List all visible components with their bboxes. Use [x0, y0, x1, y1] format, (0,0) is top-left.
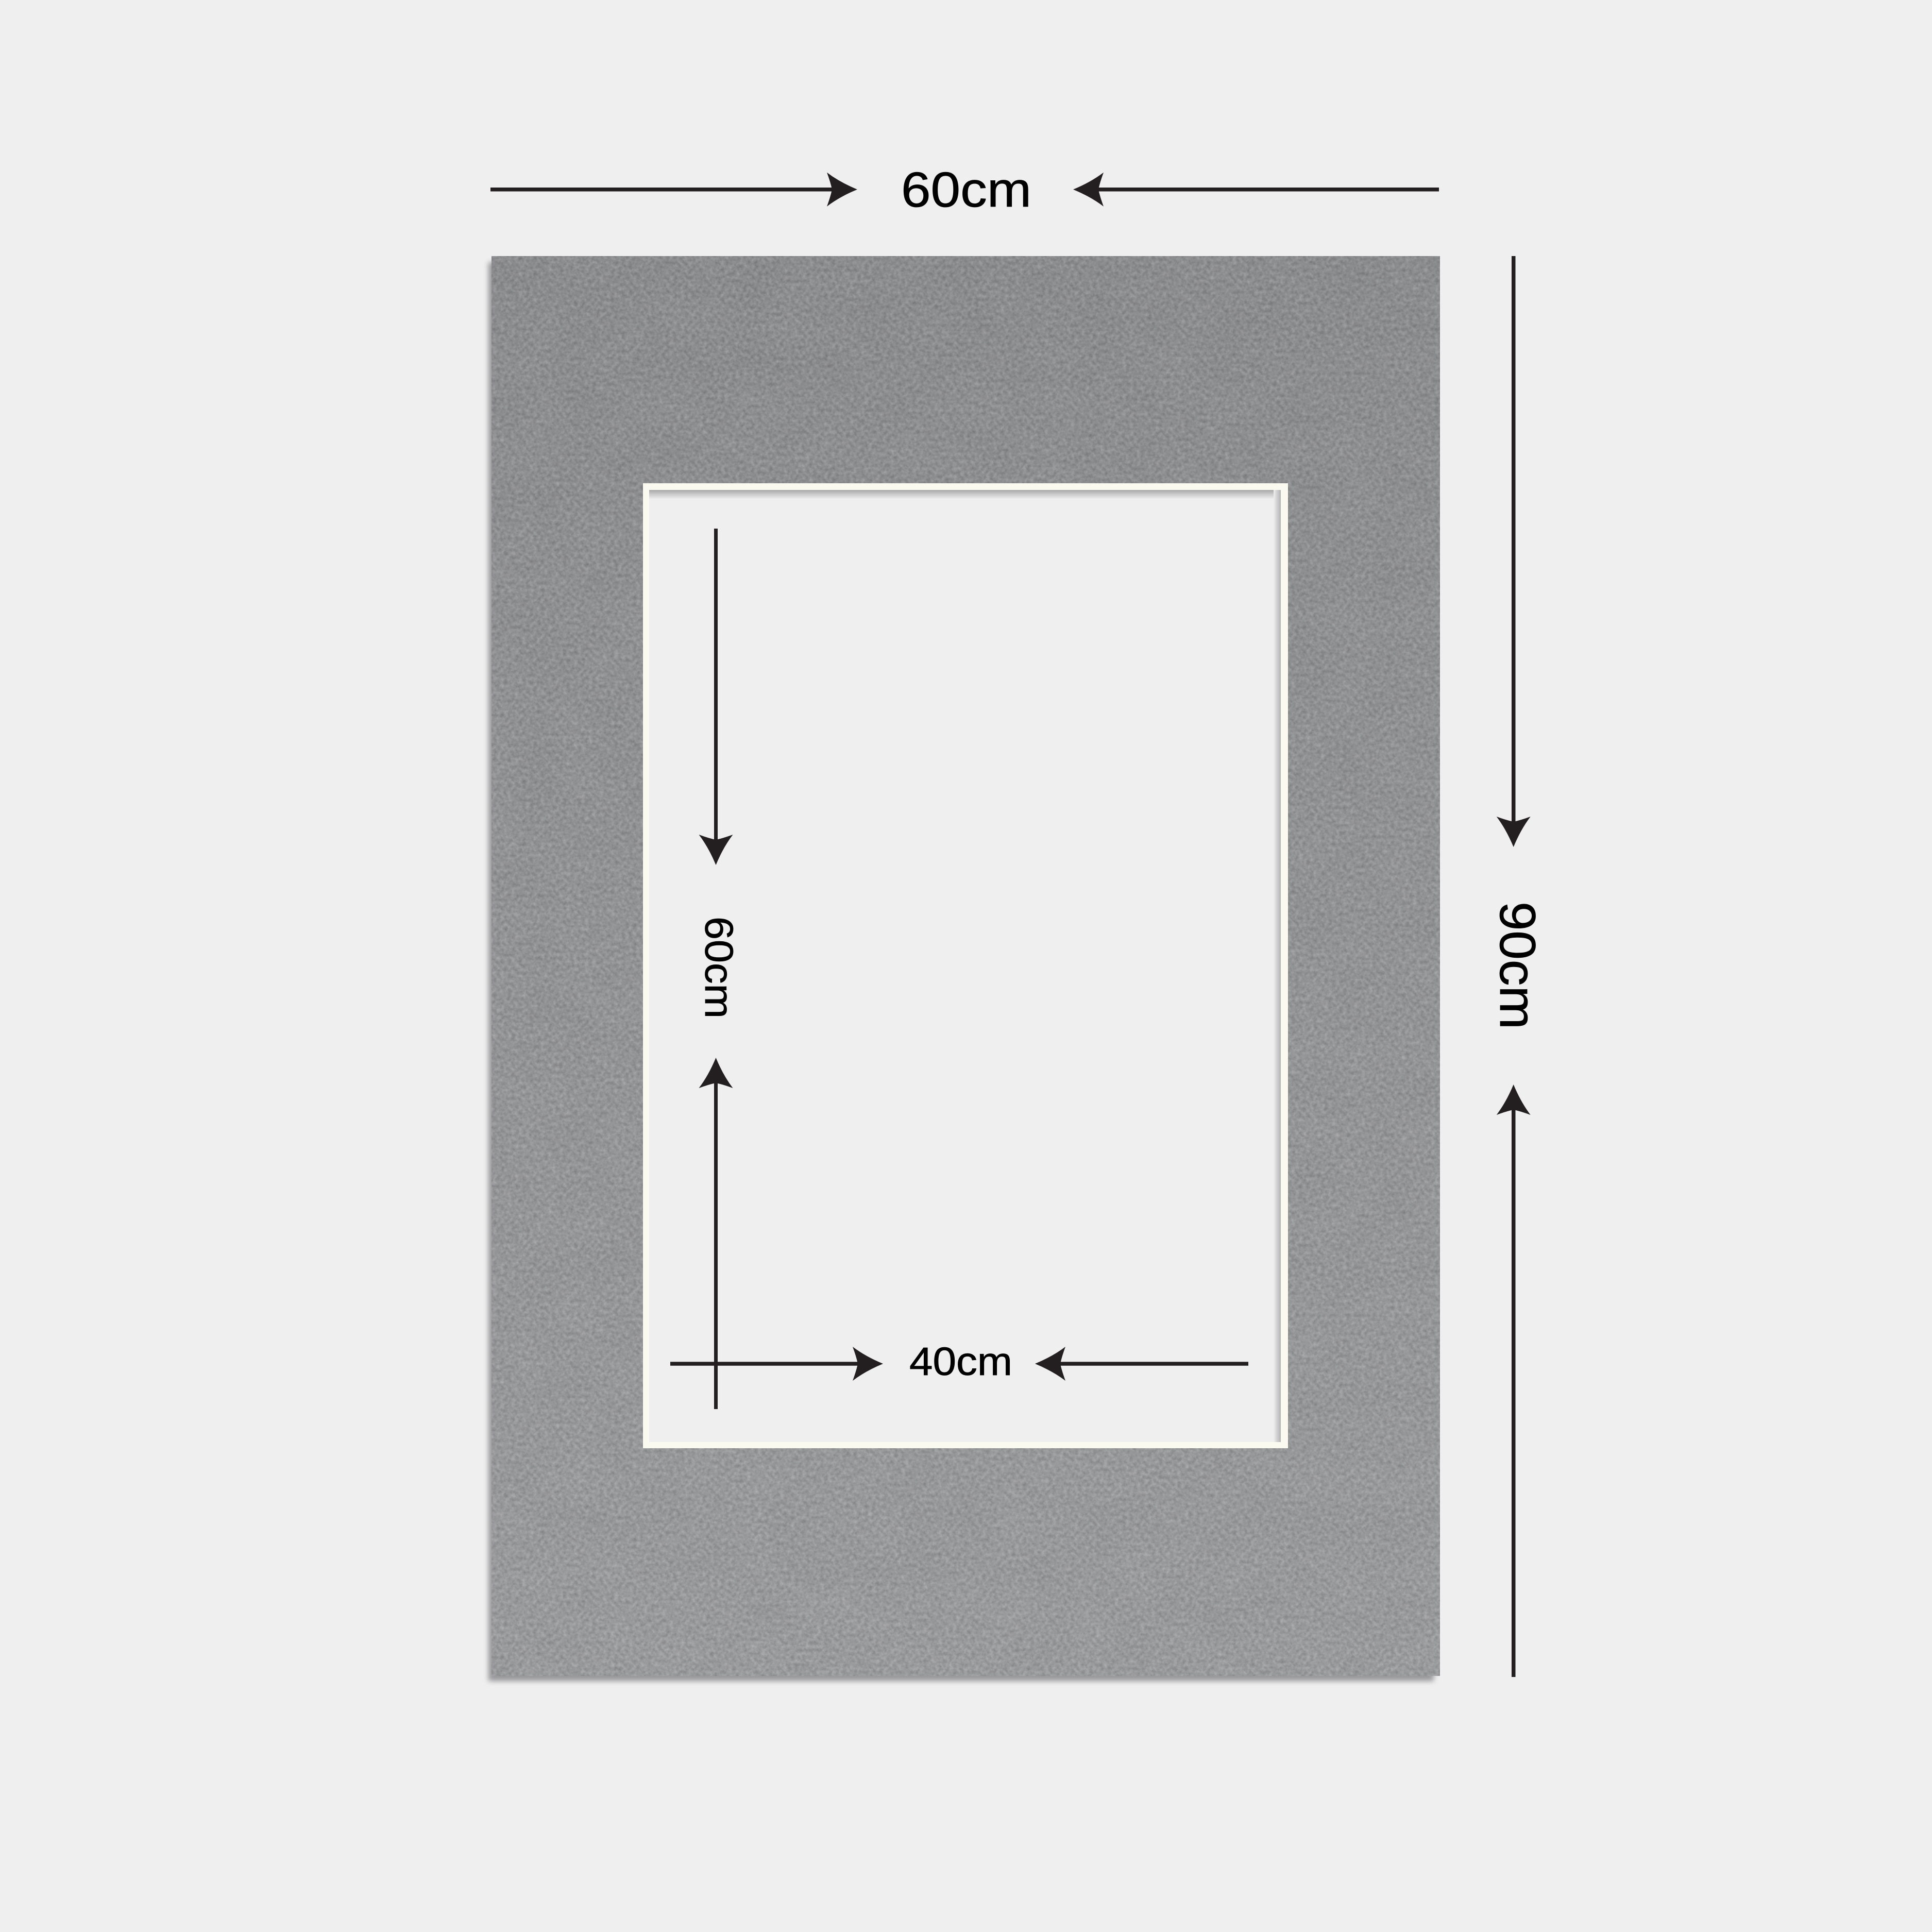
dimension: window width 40cm — [670, 1340, 1248, 1384]
arrow: inner upper pointing down — [699, 529, 733, 865]
label: 60cm: 60cm — [901, 162, 1031, 217]
label: 90cm: 90cm — [1489, 902, 1546, 1029]
board drop shadow — [488, 262, 1434, 1681]
arrow: top right pointing left — [1073, 173, 1439, 207]
arrow: right lower pointing up — [1497, 1084, 1531, 1677]
arrow: right upper pointing down — [1497, 256, 1531, 847]
arrow: inner left pointing right — [670, 1347, 883, 1381]
arrow: inner lower pointing up — [699, 1058, 733, 1409]
dimension: outer width 60cm — [490, 162, 1439, 217]
arrow: inner right pointing left — [1035, 1347, 1248, 1381]
board surface with paper texture — [492, 256, 1440, 1676]
label: inner 60cm: 60cm — [697, 917, 741, 1019]
mat board panel — [488, 256, 1440, 1681]
dimension: window height 60cm — [697, 529, 741, 1409]
label: 40cm: 40cm — [909, 1340, 1012, 1384]
window opening with cream bevel — [643, 483, 1288, 1448]
dimension: outer height 90cm — [1489, 256, 1546, 1677]
arrow: top left pointing right — [490, 173, 857, 207]
